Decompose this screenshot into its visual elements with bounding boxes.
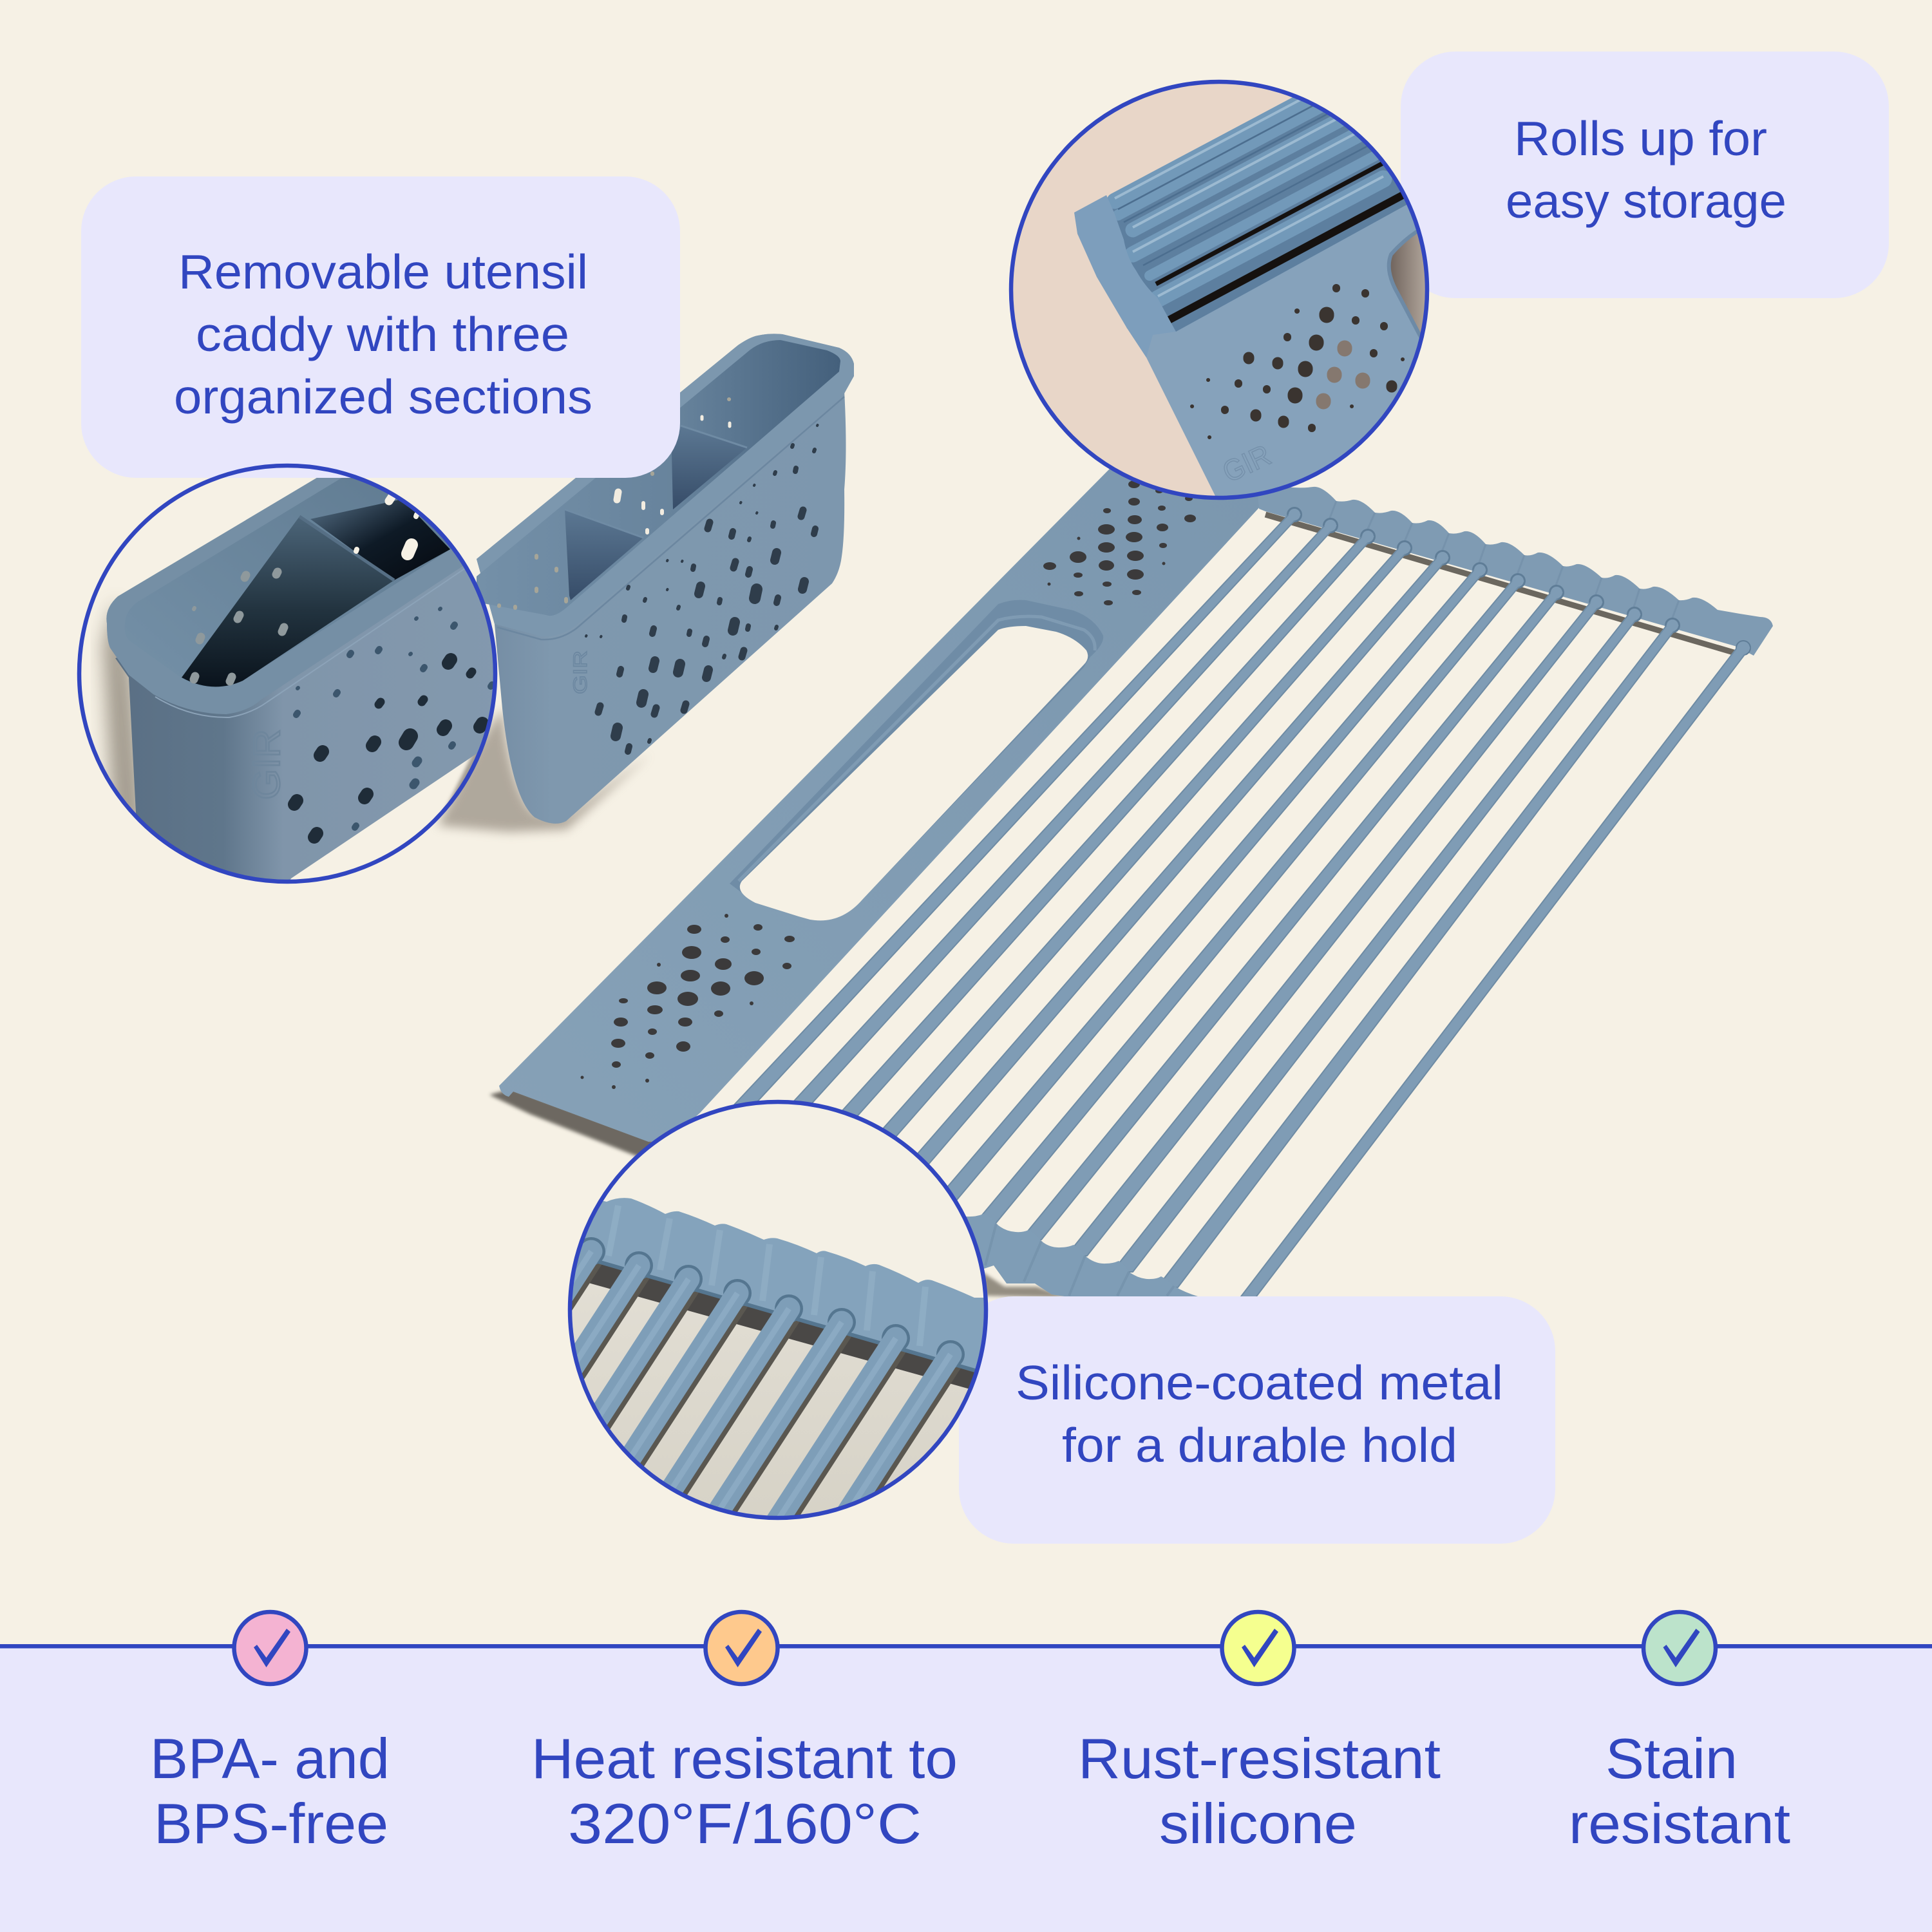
check badge pink — [234, 1612, 307, 1684]
callout panel — [1401, 52, 1889, 298]
caddy back wall gray holes — [499, 399, 729, 608]
feature label: Heat resistant to — [531, 1727, 958, 1790]
bottom strip corrugation — [985, 1224, 1174, 1296]
rack silicone band with handle — [499, 367, 1278, 1142]
magnified compartment — [310, 499, 450, 580]
caddy divider one ridge — [565, 509, 643, 538]
magnified caddy shadow right — [444, 753, 477, 806]
feature: rust resistant — [1078, 1612, 1441, 1855]
surface between rods — [560, 1243, 995, 1546]
feature label — [1569, 1727, 1790, 1855]
magnified caddy front face — [115, 566, 493, 880]
magnified divider ridge — [299, 516, 394, 580]
feature: heat resistant — [531, 1612, 958, 1855]
rack rods — [709, 515, 1750, 1312]
magnifier ring — [1011, 82, 1427, 498]
callout text — [174, 245, 592, 424]
shadow under strip — [560, 1260, 995, 1381]
magnifier ring: caddy — [79, 466, 495, 882]
rolled rods — [1115, 81, 1383, 299]
magnifier: silicone rod detail — [400, 1102, 995, 1546]
callout text — [1506, 111, 1786, 228]
magnified front holes small — [296, 609, 492, 828]
callout text: Silicone-coated metal — [1016, 1356, 1503, 1410]
magnified light holes — [356, 497, 417, 554]
cream background — [570, 1102, 986, 1518]
dark gap lines — [1156, 162, 1414, 320]
callout text: organized sections — [174, 370, 592, 424]
rod highlights — [1115, 79, 1383, 296]
bottom wavy strip — [953, 1211, 1198, 1296]
magnifier image — [400, 1102, 995, 1546]
handle cut-out — [1389, 219, 1455, 348]
magnified interior holes — [194, 572, 284, 681]
caddy divider one — [565, 509, 643, 600]
handle rim step — [739, 616, 1095, 881]
callout text: caddy with three — [196, 307, 569, 361]
handle opening — [740, 626, 1088, 920]
feature label: resistant — [1569, 1792, 1790, 1855]
callout panel — [81, 176, 680, 478]
check badge green — [1643, 1612, 1716, 1684]
feature label: Stain — [1605, 1727, 1738, 1790]
callout text: Removable utensil — [178, 245, 588, 299]
callout text: for a durable hold — [1062, 1418, 1457, 1472]
rod joints on top strip — [1287, 507, 1751, 656]
feature: stain resistant — [1569, 1612, 1790, 1855]
caddy back wall holes — [617, 417, 730, 533]
caddy front holes — [586, 425, 818, 752]
magnified divider shadow — [182, 516, 394, 687]
caddy divider two ridge — [681, 426, 747, 448]
rod shadows — [406, 1251, 956, 1546]
callout text — [1016, 1356, 1503, 1472]
bottom feature band — [0, 1646, 1932, 1932]
feature: BPA-free — [150, 1612, 390, 1855]
strip corrugation — [609, 1206, 925, 1346]
caddy rim line — [497, 397, 844, 639]
caddy interior — [477, 340, 840, 616]
rack band shadow — [489, 1088, 656, 1157]
check badge orange — [706, 1612, 778, 1684]
magnified front holes large — [294, 659, 482, 837]
callout panel — [959, 1296, 1555, 1544]
feature label: BPA- and — [150, 1727, 390, 1790]
feature label — [150, 1727, 390, 1855]
feature label: Rust-resistant — [1078, 1727, 1441, 1790]
magnified caddy interior — [185, 478, 451, 654]
top strip corrugation — [1328, 501, 1679, 625]
peach background — [1011, 82, 1427, 498]
rod joints — [577, 1237, 965, 1368]
embossed logo: GIR — [1217, 438, 1276, 489]
magnified rim line — [155, 568, 465, 718]
magnified caddy rim — [106, 478, 457, 714]
feature label: silicone — [1159, 1792, 1357, 1855]
handle rim — [730, 600, 1103, 916]
caddy embossed logo: GIR — [570, 650, 591, 694]
callout: silicone-coated metal — [959, 1296, 1555, 1544]
upper band perforations — [1043, 480, 1196, 605]
magnified caddy shadow left — [103, 599, 145, 831]
divider line — [0, 1644, 1932, 1649]
callout: rolls up — [1401, 52, 1889, 298]
feature label — [1078, 1727, 1441, 1855]
bottom strip shadow — [982, 1272, 1069, 1298]
caddy body — [477, 334, 854, 824]
check badge yellow — [1222, 1612, 1294, 1684]
lower band perforations — [581, 914, 795, 1089]
feature label: 320°F/160°C — [568, 1792, 922, 1855]
magnifier image — [1013, 84, 1425, 496]
magnifier background — [437, 756, 473, 815]
callout: utensil caddy — [81, 176, 680, 478]
rod dark separators — [1118, 90, 1368, 265]
magnifier: caddy detail — [91, 478, 493, 880]
callout text: easy storage — [1506, 174, 1786, 228]
rolled band — [1126, 193, 1481, 515]
magnified rods — [400, 1251, 951, 1546]
magnifier: rolled rack detail — [1009, 80, 1430, 500]
callout text: Rolls up for — [1514, 111, 1767, 166]
magnified embossed logo: GIR — [246, 729, 288, 800]
caddy rim top — [477, 334, 854, 636]
dark perforations — [1192, 288, 1403, 437]
feature label — [531, 1727, 958, 1855]
top wavy strip — [1256, 473, 1773, 656]
gap behind rods — [1095, 84, 1455, 338]
magnified caddy rim tint — [106, 478, 317, 658]
feature label: BPS-free — [154, 1792, 388, 1855]
product: utensil caddy — [438, 334, 854, 832]
strip lower edge — [560, 1251, 995, 1376]
rod highlights — [400, 1251, 951, 1546]
magnifier ring — [570, 1102, 986, 1518]
caddy divider two — [672, 426, 747, 509]
rod end caps — [1289, 509, 1750, 654]
top strip shadow — [1265, 515, 1736, 653]
product: roll-up drying rack — [489, 367, 1773, 1312]
caddy shadow — [438, 708, 650, 832]
wavy strip — [560, 1191, 995, 1376]
rolled strip end — [1074, 195, 1176, 357]
lighter perforations — [1323, 348, 1363, 402]
